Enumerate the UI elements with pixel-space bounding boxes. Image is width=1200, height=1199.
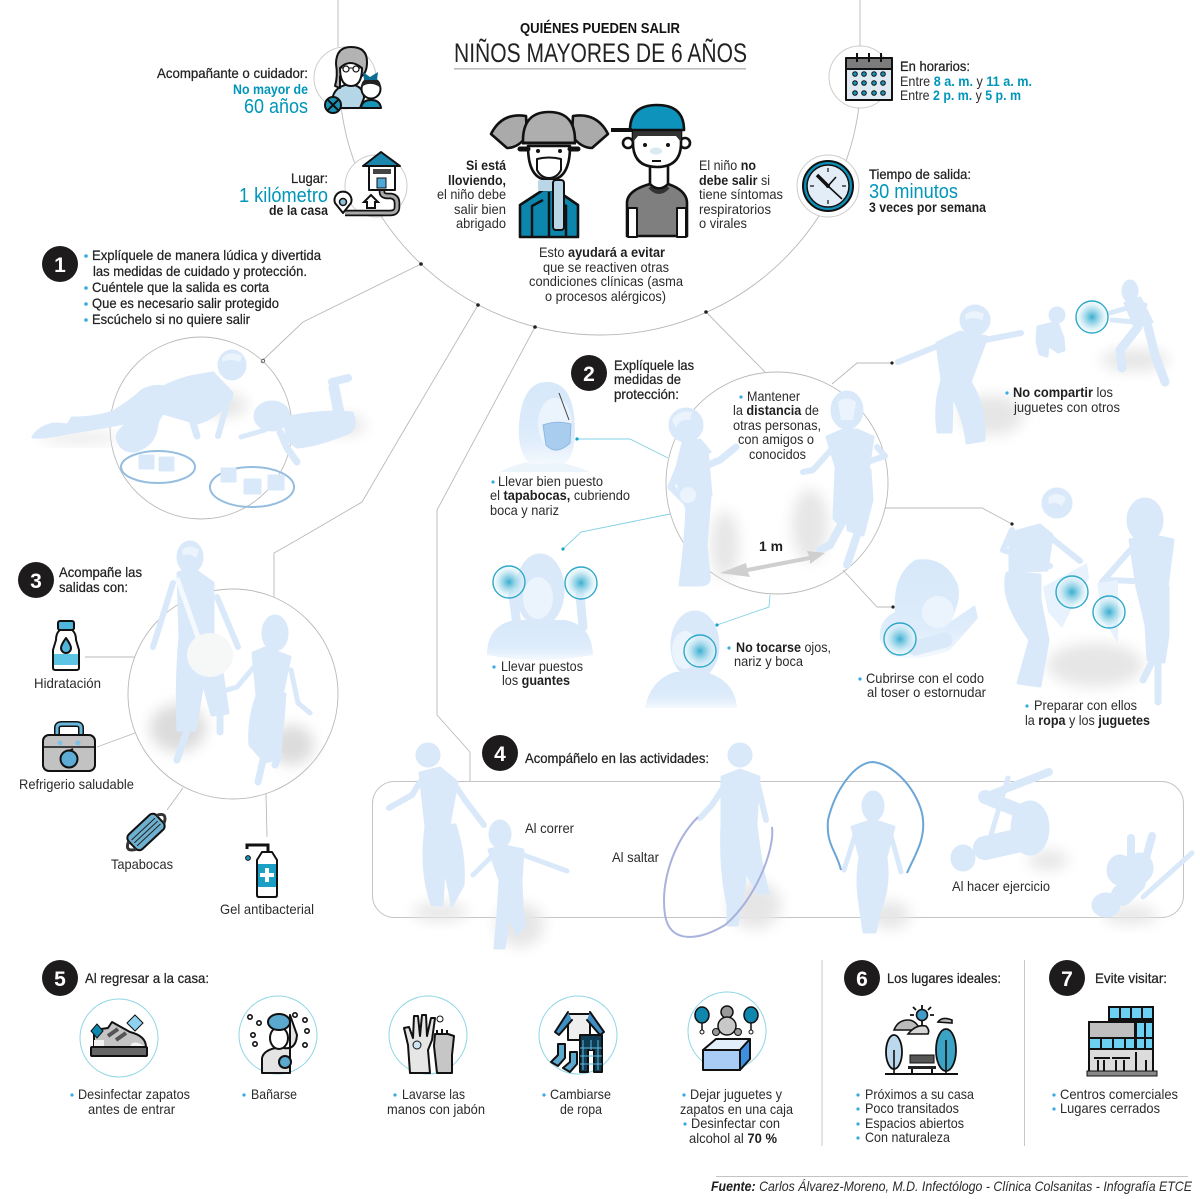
text: cough xyxy=(858,670,986,700)
text: ideal places xyxy=(856,1086,974,1145)
badge 1: 1 xyxy=(54,254,66,277)
icon: buildings xyxy=(1087,1006,1157,1076)
arrow: one metre: 1 m xyxy=(759,538,783,554)
connector lines xyxy=(85,0,1014,837)
text: face mask: Llevar bien puesto xyxy=(498,473,603,489)
place text: 1 kilómetro xyxy=(239,185,328,207)
figure: girl touching her face xyxy=(645,612,737,708)
text: cough: al toser o estornudar xyxy=(867,684,986,700)
step 3 heading: salidas con: xyxy=(59,579,128,595)
step 1 list: Cuéntele que la salida es corta xyxy=(92,279,269,295)
text: time: 30 minutos xyxy=(869,181,958,203)
caregiver text: 60 años xyxy=(244,96,308,118)
icon: water bottle xyxy=(53,621,79,670)
text: change clothes xyxy=(542,1086,611,1117)
text: symptoms: debe salir si xyxy=(699,172,770,188)
text: wash hands: manos con jabón xyxy=(387,1101,485,1117)
badge 5 xyxy=(42,960,78,996)
caregiver text xyxy=(157,65,308,118)
step 1 list: las medidas de cuidado y protección. xyxy=(93,263,307,279)
step 7 heading: Evite visitar: xyxy=(1095,970,1167,986)
figure: child with skipping rope xyxy=(828,762,923,932)
text: distance: otras personas, xyxy=(733,417,821,433)
panel: step 7 xyxy=(1049,960,1178,1116)
text: rainy day: el niño debe xyxy=(437,186,506,202)
hoops and cubes xyxy=(121,451,294,507)
text: clothes: Preparar con ellos xyxy=(1034,697,1137,713)
icon: face mask xyxy=(121,808,171,856)
text: clothes xyxy=(1025,697,1150,728)
step 1 list xyxy=(84,247,321,327)
figure: boy and others with ball xyxy=(898,281,1169,443)
text: avoid places: Centros comerciales xyxy=(1060,1086,1178,1102)
step 6 heading: Los lugares ideales: xyxy=(887,970,1001,986)
icon: clothes xyxy=(539,996,617,1074)
text: time: Tiempo de salida: xyxy=(869,166,971,182)
figure: adult and child walking xyxy=(150,542,314,782)
text: symptoms: tiene síntomas xyxy=(699,186,783,202)
text: no touching xyxy=(727,639,831,669)
place text: de la casa xyxy=(269,202,328,218)
text: rainy day xyxy=(437,157,506,231)
arrow: one metre xyxy=(720,538,825,577)
figure: girl with face mask xyxy=(500,382,590,472)
title: QUIÉNES PUEDEN SALIR xyxy=(520,20,680,37)
panel: step 3 xyxy=(18,542,338,917)
text: rainy day: lloviendo, xyxy=(448,172,506,188)
text: ideal places: Próximos a su casa xyxy=(865,1086,974,1102)
divider 7 xyxy=(1024,960,1025,1146)
icon: toys in box xyxy=(688,992,766,1070)
label: mask: Tapabocas xyxy=(111,856,173,872)
schedule text: Entre 8 a. m. y 11 a. m. xyxy=(900,73,1032,89)
text: toys and shoes in a box: Desinfectar con xyxy=(691,1115,780,1131)
text: toys and shoes in a box: alcohol al 70 % xyxy=(689,1130,778,1146)
step 1 list: Explíquele de manera lúdica y divertida xyxy=(92,247,321,263)
text: time: 3 veces por semana xyxy=(869,199,986,215)
text: distance: la distancia de xyxy=(733,402,819,418)
text: rainy day: Si está xyxy=(466,157,506,173)
figure: adult exercising xyxy=(952,772,1068,870)
title: NIÑOS MAYORES DE 6 AÑOS xyxy=(454,37,747,68)
step 1 list: Que es necesario salir protegido xyxy=(92,295,279,311)
text: gloves: los guantes xyxy=(502,672,570,688)
text: no touching: nariz y boca xyxy=(734,653,803,669)
step 3 heading: Acompañe las xyxy=(59,564,142,580)
icon: hand sanitizer xyxy=(246,845,277,897)
text: ideal places: Con naturaleza xyxy=(865,1129,950,1145)
step 4 heading: Acompáñelo en las actividades: xyxy=(525,750,709,766)
text: change clothes: de ropa xyxy=(560,1101,602,1117)
figure: boy and girl keeping distance xyxy=(670,392,885,585)
icon: caregiver and child xyxy=(314,47,381,113)
panel: step 4 xyxy=(372,735,1192,948)
schedule text: Entre 2 p. m. y 5 p. m xyxy=(900,87,1021,103)
figure: child exercising xyxy=(1093,836,1192,924)
text: no touching: No tocarse ojos, xyxy=(736,639,831,655)
place text xyxy=(239,170,328,218)
icon: hands xyxy=(389,996,467,1074)
text: toys: juguetes con otros xyxy=(1013,399,1120,415)
text: change clothes: Cambiarse xyxy=(550,1086,611,1102)
text: symptoms xyxy=(699,157,783,231)
caregiver text: No mayor de xyxy=(233,81,308,97)
figure: girl coughing into elbow xyxy=(880,559,978,658)
icon: calendar xyxy=(829,46,892,108)
step 5 heading: Al regresar a la casa: xyxy=(85,970,209,986)
badge 4 xyxy=(482,735,518,771)
label: jumping: Al saltar xyxy=(612,849,659,865)
icon: shoe xyxy=(80,999,158,1077)
text: ideal places: Poco transitados xyxy=(865,1100,959,1116)
label: hydration: Hidratación xyxy=(34,675,101,691)
text: disinfect shoes: antes de entrar xyxy=(88,1101,175,1117)
activity frame xyxy=(372,782,1184,918)
text: disinfect shoes xyxy=(70,1086,190,1117)
icon: girl with mask and scarf xyxy=(491,112,608,238)
text: bath: Bañarse xyxy=(251,1086,297,1102)
text: time xyxy=(869,166,986,215)
text: wash hands: Lavarse las xyxy=(402,1086,465,1102)
text: toys and shoes in a box xyxy=(680,1086,793,1146)
step 2 heading: medidas de xyxy=(614,371,681,387)
text: symptoms: o virales xyxy=(699,215,747,231)
schedule text xyxy=(900,58,1032,103)
text: face mask: el tapabocas, cubriendo xyxy=(490,487,630,503)
text: clothes: la ropa y los juguetes xyxy=(1025,712,1150,728)
badge 7 xyxy=(1049,960,1085,996)
badge 6: 6 xyxy=(856,968,868,991)
text: cough: Cubrirse con el codo xyxy=(866,670,984,686)
text: disinfect shoes: Desinfectar zapatos xyxy=(78,1086,190,1102)
badge 6 xyxy=(844,960,880,996)
text: wash hands xyxy=(387,1086,485,1117)
icon: shower xyxy=(239,996,317,1074)
panel: step 2 xyxy=(487,281,1173,728)
badge 3: 3 xyxy=(30,570,42,593)
figure: adult and child lying on the floor xyxy=(33,351,365,462)
icon: clock xyxy=(797,155,859,217)
step 3 heading xyxy=(59,564,142,595)
text: avoid reactivation: condiciones clínicas (asma xyxy=(529,273,683,289)
figure: adult and child preparing clothes xyxy=(1003,489,1173,702)
text: gloves xyxy=(492,658,583,688)
badge 5: 5 xyxy=(54,968,66,991)
badge 1 xyxy=(42,246,78,282)
divider 6 xyxy=(822,960,823,1146)
text: toys and shoes in a box: zapatos en una caja xyxy=(680,1101,793,1117)
text: face mask: boca y nariz xyxy=(490,502,559,518)
icon: park xyxy=(885,1005,958,1075)
text: symptoms: El niño no xyxy=(699,157,756,173)
text: rainy day: salir bien xyxy=(454,201,506,217)
text: rainy day: abrigado xyxy=(456,215,506,231)
place text: Lugar: xyxy=(291,170,328,186)
badge 2: 2 xyxy=(583,363,595,386)
text: toys xyxy=(1005,384,1120,415)
text: avoid reactivation: Esto ayudará a evitar xyxy=(539,244,665,260)
badge 3 xyxy=(18,562,54,598)
caregiver text: Acompañante o cuidador: xyxy=(157,65,308,81)
circle xyxy=(110,337,292,519)
text: ideal places: Espacios abiertos xyxy=(865,1115,964,1131)
title xyxy=(454,20,747,70)
text: distance xyxy=(733,388,821,462)
text: symptoms: respiratorios xyxy=(699,201,771,217)
text: face mask xyxy=(490,473,630,518)
text: distance: con amigos o xyxy=(738,431,814,447)
label: sanitizer: Gel antibacterial xyxy=(220,901,314,917)
step 2 heading xyxy=(614,357,694,402)
text: avoid reactivation: que se reactiven otras xyxy=(543,259,669,275)
text: avoid places: Lugares cerrados xyxy=(1060,1100,1160,1116)
figure: running xyxy=(389,744,567,948)
label: exercising: Al hacer ejercicio xyxy=(952,878,1050,894)
text: distance: Mantener xyxy=(747,388,800,404)
text: avoid reactivation: o procesos alérgicos) xyxy=(545,288,666,304)
figure: adult with skipping rope xyxy=(664,744,781,937)
badge 4: 4 xyxy=(494,743,506,766)
panel: step 1 xyxy=(33,246,365,519)
schedule text: En horarios: xyxy=(900,58,970,74)
step 2 heading: protección: xyxy=(614,386,679,402)
badge 2 xyxy=(571,355,607,391)
text: toys and shoes in a box: Dejar juguetes y xyxy=(690,1086,782,1102)
icon: boy with cap xyxy=(611,105,690,237)
circle xyxy=(666,372,888,594)
badge 7: 7 xyxy=(1061,968,1073,991)
label: running: Al correr xyxy=(525,820,574,836)
panel: step 5 xyxy=(42,960,793,1146)
step 1 list: Escúchelo si no quiere salir xyxy=(92,311,250,327)
icon: lunch box xyxy=(43,724,95,771)
panel: step 6 xyxy=(844,960,1001,1145)
text: avoid reactivation xyxy=(529,244,683,304)
label: snack: Refrigerio saludable xyxy=(19,776,134,792)
text: distance: conocidos xyxy=(749,446,806,462)
text: avoid places xyxy=(1052,1086,1178,1116)
icon: house and route xyxy=(334,152,407,217)
circle xyxy=(128,589,338,799)
text: gloves: Llevar puestos xyxy=(501,658,583,674)
text: toys: No compartir los xyxy=(1013,384,1113,400)
figure: girl with gloves xyxy=(487,555,597,660)
step 2 heading: Explíquele las xyxy=(614,357,694,373)
